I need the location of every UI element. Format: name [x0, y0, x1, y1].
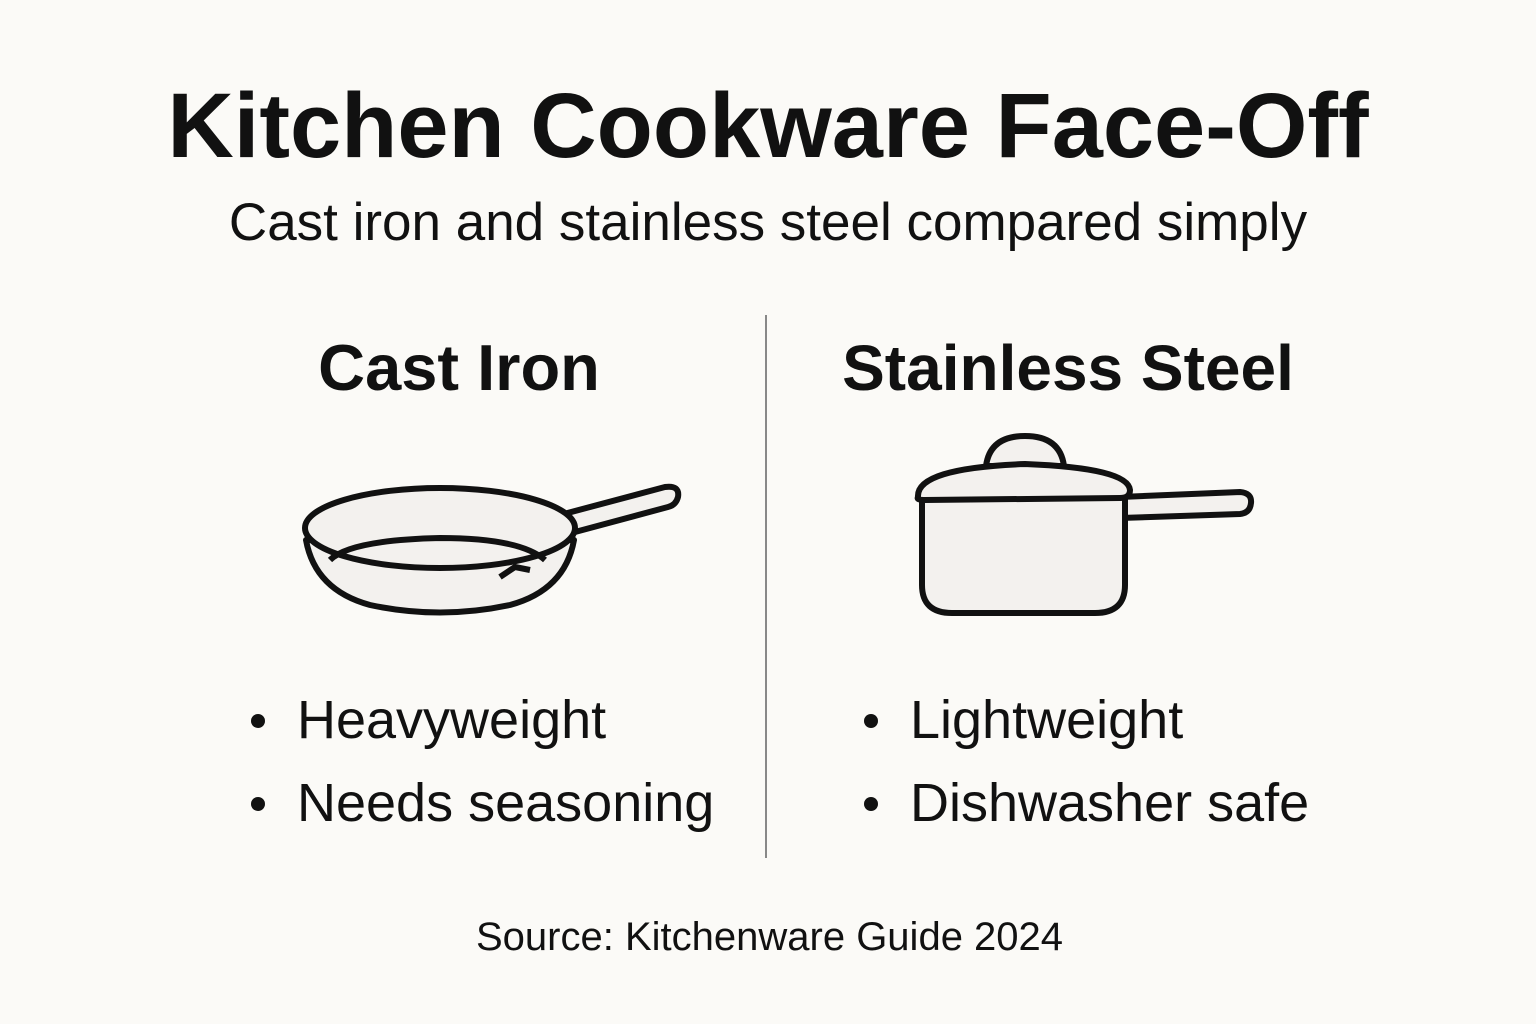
subtitle: Cast iron and stainless steel compared simply [229, 193, 1307, 252]
source: Source: Kitchenware Guide 2024 [476, 915, 1063, 959]
title: Kitchen Cookware Face-Off [167, 75, 1369, 177]
bullets: cast iron [251, 690, 714, 833]
icon: saucepan [914, 433, 1254, 616]
bullets: stainless steel: Dishwasher safe [910, 773, 1309, 833]
icon: frying pan [302, 484, 682, 616]
bullets: stainless steel [864, 690, 1309, 833]
divider [765, 315, 767, 858]
bullets: cast iron: Heavyweight [297, 690, 606, 750]
bullets: cast iron: Needs seasoning [297, 773, 714, 833]
heading: stainless steel: Stainless Steel [842, 332, 1294, 404]
bullets: stainless steel: Lightweight [910, 690, 1183, 750]
heading: cast iron: Cast Iron [318, 331, 600, 404]
